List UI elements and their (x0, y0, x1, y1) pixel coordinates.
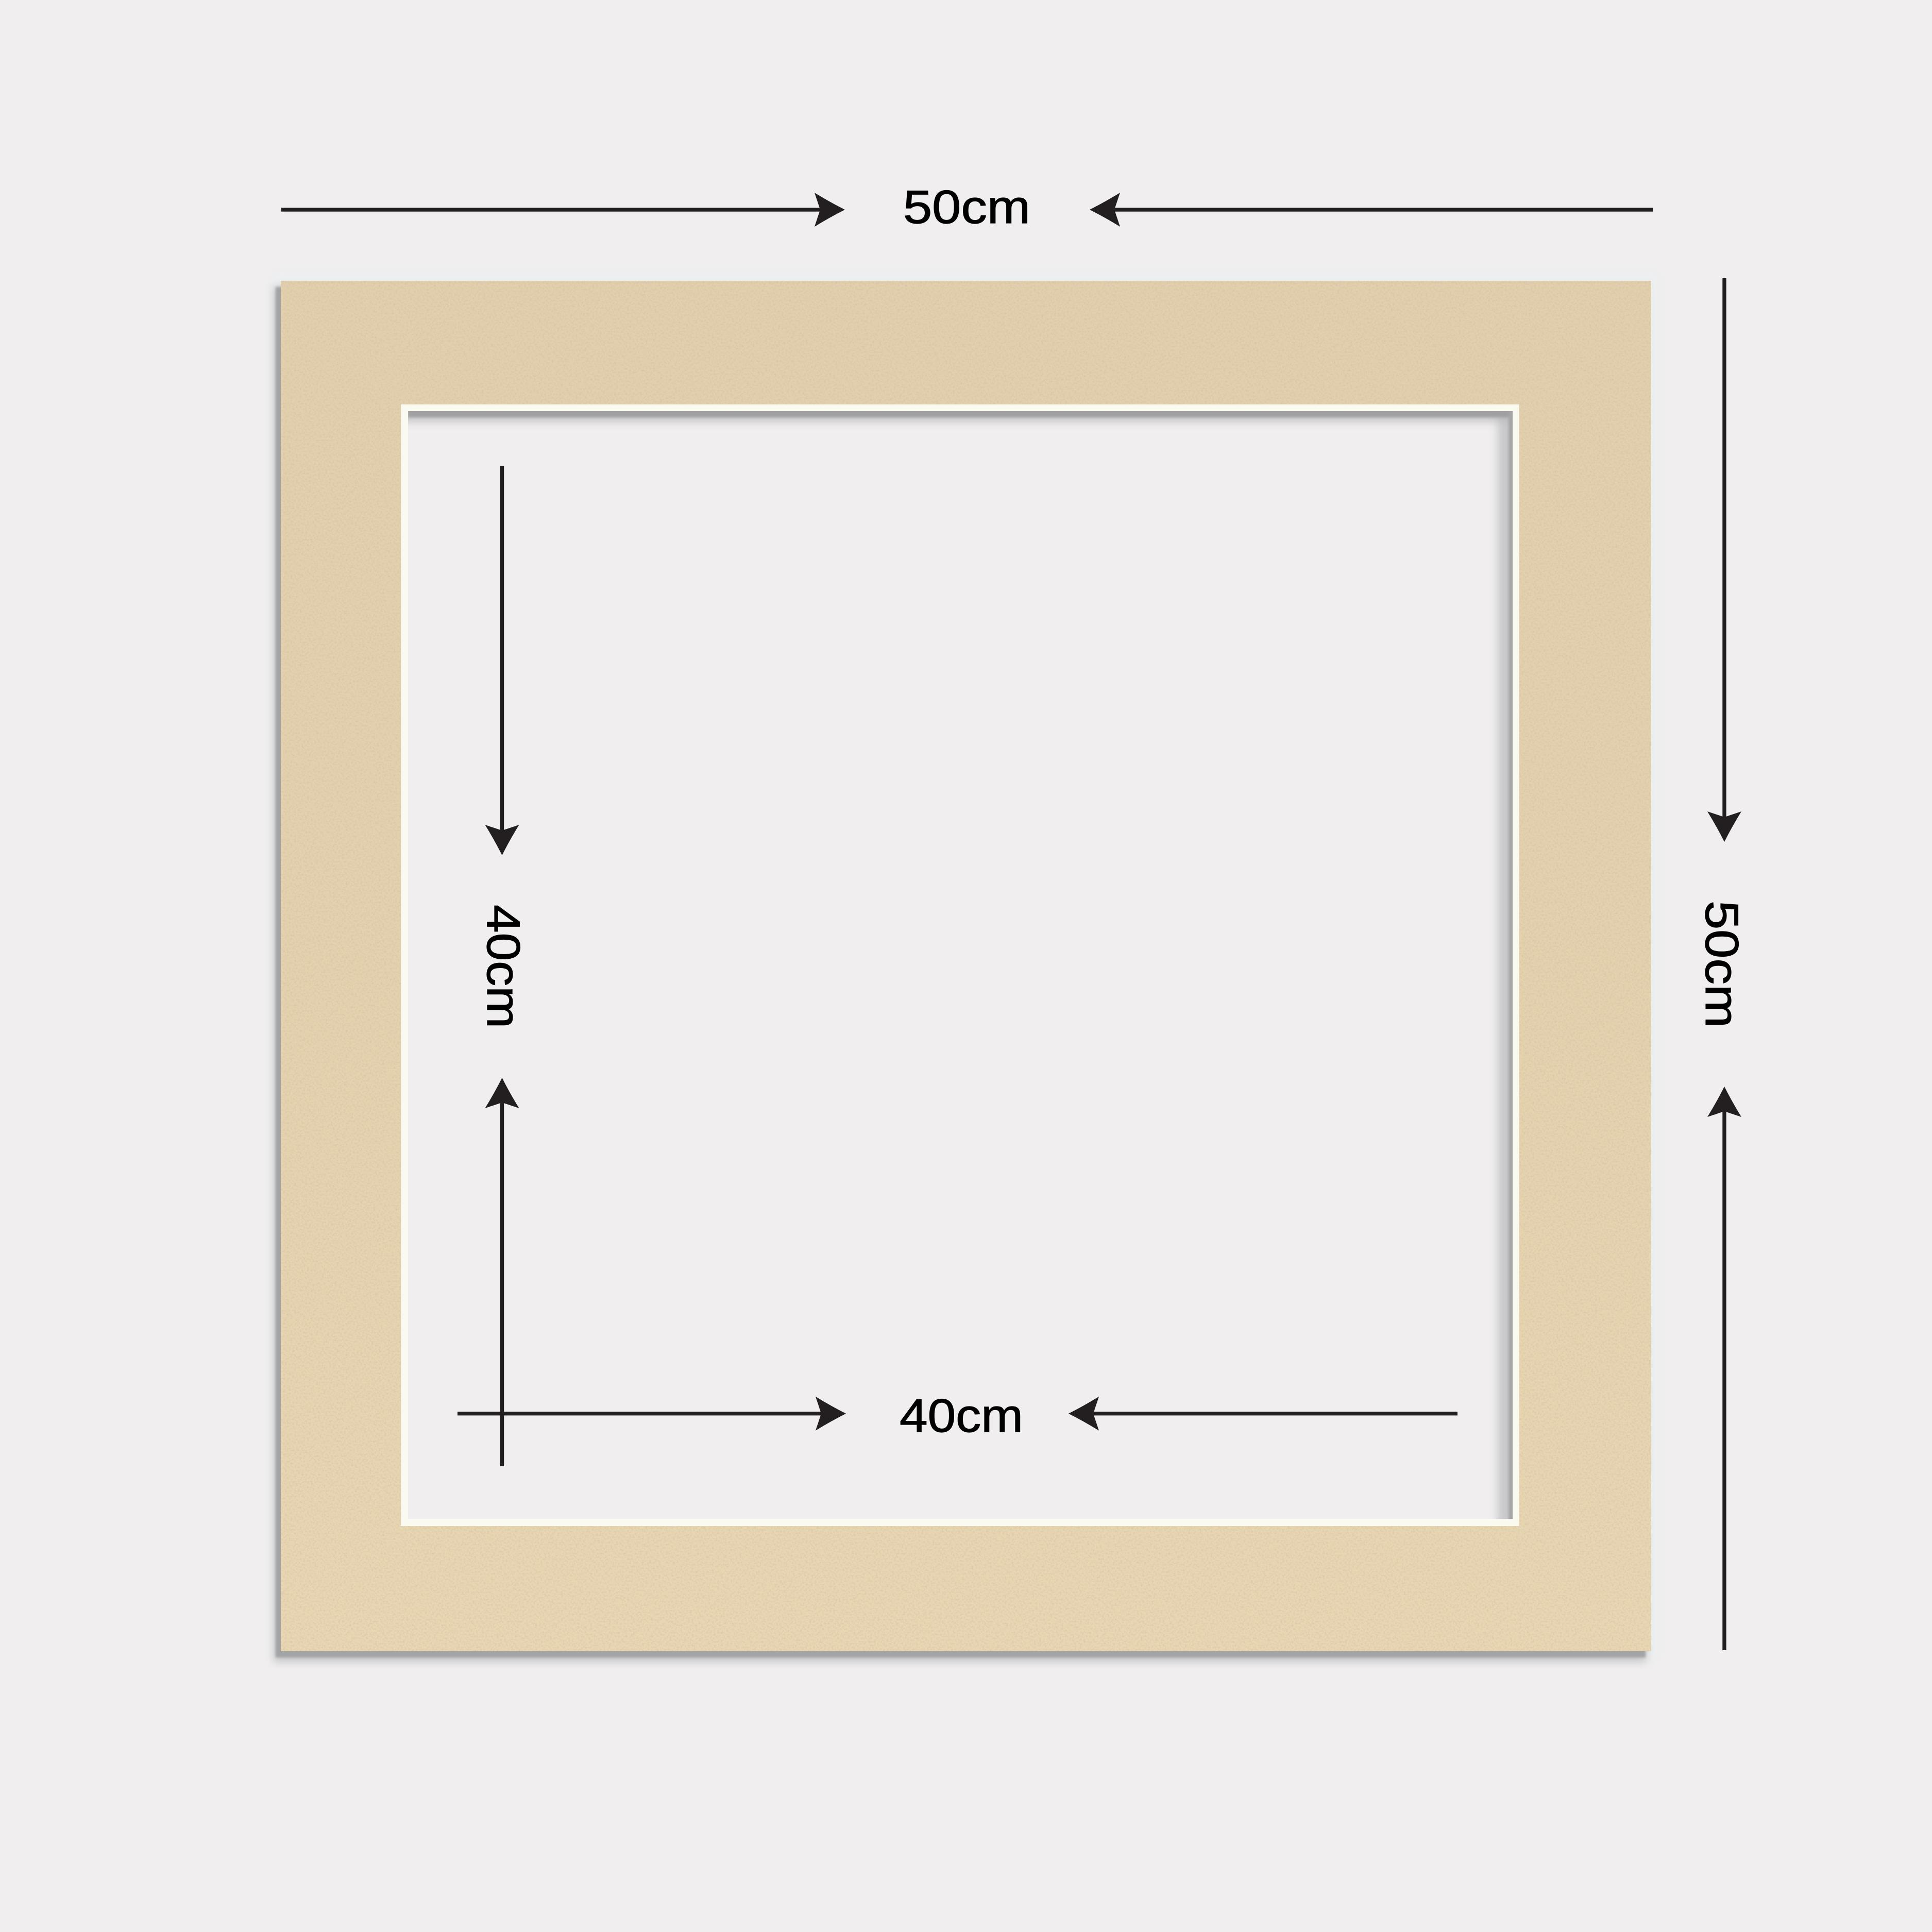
arrow: right height, upper side (1707, 278, 1741, 842)
board grain texture (281, 281, 1651, 1651)
arrow: top width, left side (281, 193, 845, 227)
panel: mount board (273, 273, 1659, 1662)
label: outer height: 50cm (1696, 901, 1748, 1028)
arrow: right height, lower side (1707, 1087, 1741, 1650)
board surface (281, 281, 1651, 1651)
opening wall area (401, 404, 1519, 1526)
label: opening height: 40cm (477, 905, 529, 1028)
label: outer width: 50cm (903, 181, 1030, 233)
arrow: opening width, left side (457, 1397, 846, 1431)
arrow: opening height, upper side (485, 466, 519, 855)
opening bevel (401, 404, 1519, 1526)
label: opening width: 40cm (900, 1390, 1023, 1442)
board hard shadow (276, 287, 1646, 1657)
board soft shadow (274, 286, 1646, 1662)
opening inner shadow (402, 397, 1525, 1528)
arrow: opening width, right side (1069, 1397, 1458, 1431)
arrow: opening height, lower side (485, 1078, 519, 1466)
arrow: top width, right side (1090, 193, 1653, 227)
board highlight glow (273, 273, 1659, 1658)
